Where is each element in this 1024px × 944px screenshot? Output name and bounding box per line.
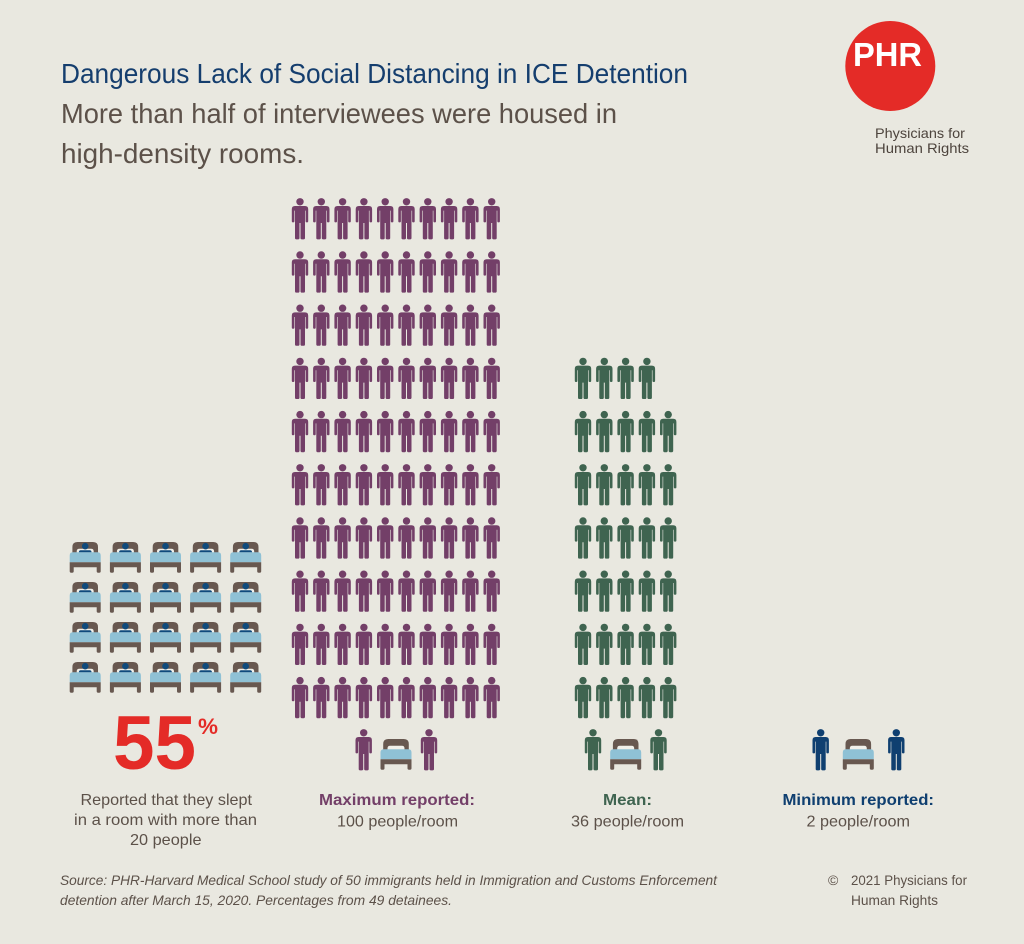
source note: [60, 872, 718, 908]
caption: 55 percent: 20 people: [130, 832, 202, 849]
copyright: [828, 872, 967, 908]
room: mean: [585, 729, 667, 770]
source note: detention after March 15, 2020. Percentages from 49 detainees.: [60, 892, 452, 908]
bed grid: 55 percent: [70, 542, 261, 693]
copyright: Human Rights: [851, 892, 938, 908]
label: mean: 36 people/room: [571, 814, 684, 830]
room: maximum: [356, 729, 437, 770]
copyright: ©: [828, 872, 839, 888]
title: Dangerous Lack of Social Distancing in ICE Detention: [61, 58, 688, 89]
label: maximum: [319, 792, 475, 830]
label: mean: Mean:: [603, 792, 652, 809]
label: maximum: Maximum reported:: [319, 792, 475, 809]
label: minimum: [782, 792, 934, 830]
logo: PHR: Physicians for: [875, 125, 965, 141]
stat: 55%: 55: [113, 701, 196, 786]
subtitle: More than half of interviewees were housed in: [61, 98, 617, 129]
logo: PHR: PHR: [853, 36, 922, 73]
people: mean 36: [575, 358, 676, 718]
stat: 55%: %: [198, 714, 218, 739]
label: minimum: Minimum reported:: [782, 792, 934, 809]
caption: 55 percent: in a room with more than: [74, 812, 257, 829]
logo: PHR: [845, 21, 969, 156]
label: mean: [571, 792, 684, 830]
logo: PHR: Human Rights: [875, 140, 969, 156]
label: minimum: 2 people/room: [806, 814, 910, 830]
subtitle: high-density rooms.: [61, 138, 304, 169]
subtitle: [61, 98, 617, 169]
caption: 55 percent: [74, 792, 257, 849]
room: minimum: [812, 729, 904, 770]
label: maximum: 100 people/room: [337, 814, 458, 830]
people: maximum 100: [292, 198, 500, 718]
caption: 55 percent: Reported that they slept: [80, 792, 253, 809]
source note: Source: PHR-Harvard Medical School study of 50 immigrants held in Immigration and Customs Enforcement: [60, 872, 718, 888]
copyright: 2021 Physicians for: [851, 872, 967, 888]
